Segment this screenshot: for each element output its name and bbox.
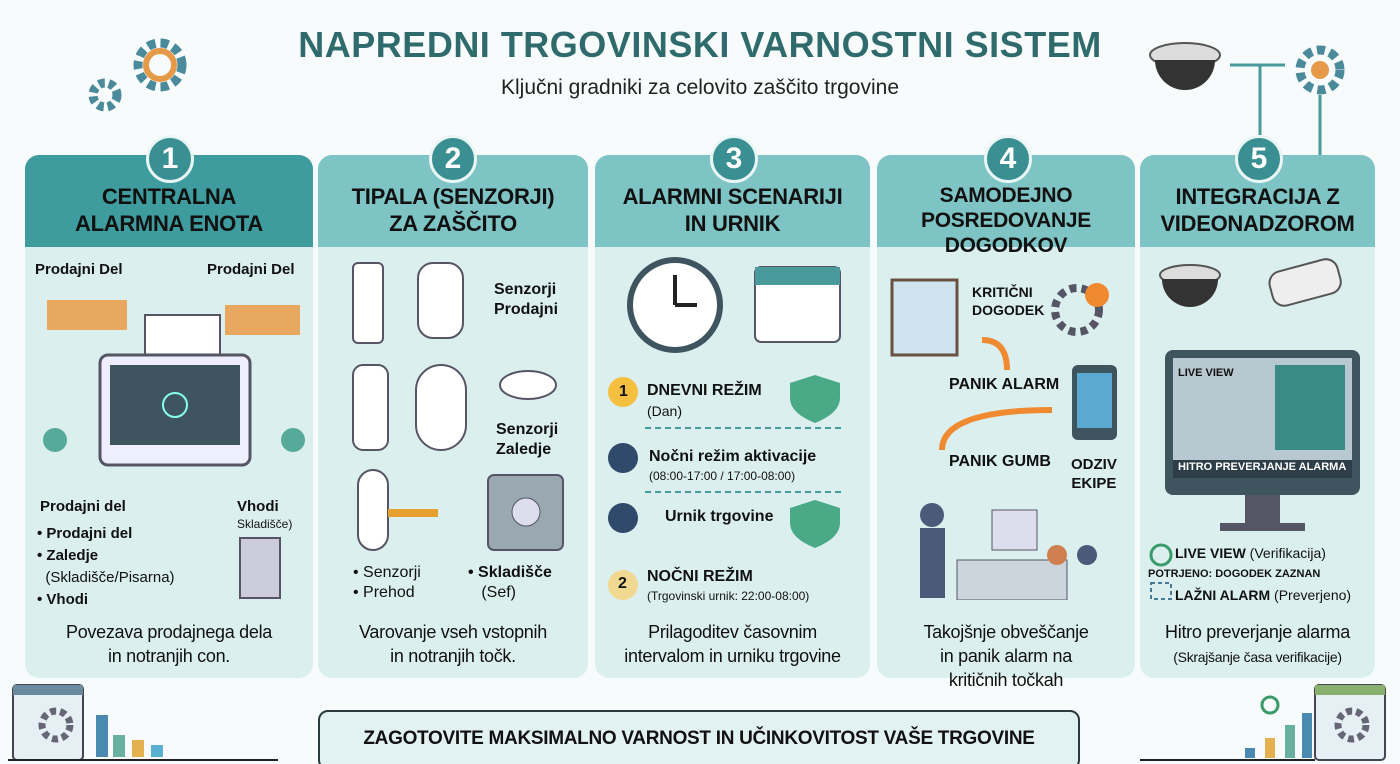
- icon: door: [239, 537, 281, 599]
- panel: 4 event dispatch: KRITIČNI: [972, 284, 1033, 300]
- title: NAPREDNI TRGOVINSKI VARNOSTNI SISTEM: [298, 24, 1102, 65]
- subtitle: Ključni gradniki za celovito zaščito trgovine: [501, 76, 899, 99]
- panel: 5 video integration: LIVE VIEW (Verifikacija): [1175, 545, 1326, 561]
- decoration: bottom right dashboard: [1140, 684, 1386, 761]
- number 1: 1: [162, 142, 178, 175]
- panel: 1 central alarm unit: • Vhodi: [37, 591, 88, 608]
- heading 5: VIDEONADZOROM: [1160, 211, 1355, 236]
- panel: 5 video integration: POTRJENO: DOGODEK ZAZNAN: [1148, 568, 1320, 580]
- scenario list: (08:00-17:00 / 17:00-08:00): [649, 469, 795, 483]
- heading 1: ALARMNA ENOTA: [75, 211, 263, 236]
- panel: 5 video integration: LAŽNI ALARM (Preverjeno): [1175, 587, 1351, 603]
- panel: 2 sensors: • Senzorji: [353, 564, 421, 581]
- panel: 1 central alarm unit: Vhodi: [237, 498, 279, 515]
- panel: 2 sensors: Senzorji: [496, 421, 558, 438]
- scenario list: [608, 375, 841, 603]
- heading 5: [1140, 155, 1375, 247]
- icon: broken window, gear, phone, person: [890, 278, 1117, 600]
- scenario list: Nočni režim aktivacije: [649, 448, 816, 465]
- panel: 2 sensors: • Prehod: [353, 584, 415, 601]
- heading 1: [25, 155, 313, 247]
- panel: 1 central alarm unit: • Zaledje: [37, 547, 98, 564]
- panel: 1 central alarm unit: • Prodajni del: [37, 525, 132, 542]
- heading 4: SAMODEJNO: [940, 184, 1072, 207]
- caption 2: Varovanje vseh vstopnih: [359, 622, 547, 642]
- number 3: [710, 135, 758, 183]
- panel: 4 event dispatch: EKIPE: [1071, 475, 1116, 492]
- panel: 2 sensors: Prodajni: [494, 301, 558, 318]
- number 3: 3: [726, 142, 742, 175]
- caption 2: [359, 622, 547, 666]
- panel: 2 sensors: Zaledje: [496, 441, 551, 458]
- scenario list: 1: [619, 383, 628, 400]
- panel: 4 event dispatch: ODZIV: [1071, 456, 1117, 473]
- footer banner: ZAGOTOVITE MAKSIMALNO VARNOST IN UČINKOVITOST VAŠE TRGOVINE: [363, 728, 1035, 749]
- caption 3: intervalom in urniku trgovine: [624, 646, 841, 666]
- number 5: [1235, 135, 1283, 183]
- caption 3: [624, 622, 841, 666]
- scenario list: DNEVNI REŽIM: [647, 382, 762, 399]
- panel: 5 video integration: LIVE VIEW: [1178, 367, 1234, 379]
- caption 4: in panik alarm na: [940, 646, 1072, 666]
- text: kritičnih točkah: [949, 670, 1063, 690]
- panel: 5 video integration: HITRO PREVERJANJE ALARMA: [1178, 461, 1346, 473]
- icon: clock and calendar: [627, 257, 841, 353]
- number 2: 2: [445, 142, 461, 175]
- heading 4: POSREDOVANJE: [921, 209, 1091, 232]
- panel: 1 central alarm unit: (Skladišče/Pisarna): [45, 569, 175, 586]
- panel: 1 central alarm unit: Prodajni del: [40, 498, 126, 515]
- scenario list: (Trgovinski urnik: 22:00-08:00): [647, 589, 809, 603]
- heading 1: CENTRALNA: [102, 184, 236, 209]
- heading 4: [877, 155, 1135, 247]
- panel: 1 central alarm unit: Prodajni Del: [35, 261, 123, 278]
- caption 4: Takojšnje obveščanje: [923, 622, 1089, 642]
- heading 3: ALARMNI SCENARIJI: [623, 184, 842, 209]
- panel: 4 event dispatch: PANIK GUMB: [949, 453, 1051, 470]
- decoration: bottom left dashboard: [8, 684, 278, 761]
- caption 1: in notranjih con.: [108, 646, 230, 666]
- number 1: [146, 135, 194, 183]
- panel: 1 central alarm unit: [25, 155, 313, 678]
- icon: monitor hub: [43, 300, 305, 466]
- icon: sensors: [352, 262, 564, 551]
- panel: 2 sensors: Senzorji: [494, 281, 556, 298]
- scenario list: Urnik trgovine: [665, 508, 773, 525]
- panel: 4 event dispatch: DOGODEK: [972, 302, 1044, 318]
- caption 1: [66, 622, 272, 666]
- scenario list: 2: [618, 575, 627, 592]
- caption 1: Povezava prodajnega dela: [66, 622, 272, 642]
- panel: 3 scenarios: [595, 155, 870, 678]
- panel: 2 sensors: [318, 155, 588, 678]
- panel: 2 sensors: • Skladišče: [468, 564, 552, 581]
- panel: 1 central alarm unit: Prodajni Del: [207, 261, 295, 278]
- heading 2: ZA ZAŠČITO: [389, 211, 517, 236]
- heading 4: DOGODKOV: [945, 234, 1067, 257]
- heading 3: [595, 155, 870, 247]
- caption 3: Prilagoditev časovnim: [648, 622, 817, 642]
- footer banner: [318, 710, 1080, 764]
- icon: gears top left: [88, 38, 186, 112]
- icon: cameras and monitor: [1159, 258, 1360, 531]
- number 4: 4: [1000, 142, 1016, 175]
- panel: 5 video integration: [1140, 155, 1375, 678]
- number 5: 5: [1251, 142, 1267, 175]
- number 4: [984, 135, 1032, 183]
- caption 5: (Skrajšanje časa verifikacije): [1173, 649, 1342, 665]
- caption 5: [1165, 622, 1350, 665]
- panel: 4 event dispatch: [877, 155, 1135, 678]
- panel: 2 sensors: (Sef): [481, 584, 516, 601]
- panel: 1 central alarm unit: Skladišče): [237, 517, 292, 531]
- heading 2: [318, 155, 588, 247]
- caption 2: in notranjih točk.: [390, 646, 516, 666]
- heading 3: IN URNIK: [685, 211, 780, 236]
- caption 5: Hitro preverjanje alarma: [1165, 622, 1350, 642]
- heading 5: INTEGRACIJA Z: [1176, 184, 1339, 209]
- panel: 4 event dispatch: PANIK ALARM: [949, 376, 1059, 393]
- icon: camera and gear top right: [1149, 42, 1344, 155]
- heading 2: TIPALA (SENZORJI): [352, 184, 554, 209]
- scenario list: NOČNI REŽIM: [647, 568, 753, 585]
- scenario list: (Dan): [647, 403, 682, 419]
- caption 4: [923, 622, 1089, 666]
- number 2: [429, 135, 477, 183]
